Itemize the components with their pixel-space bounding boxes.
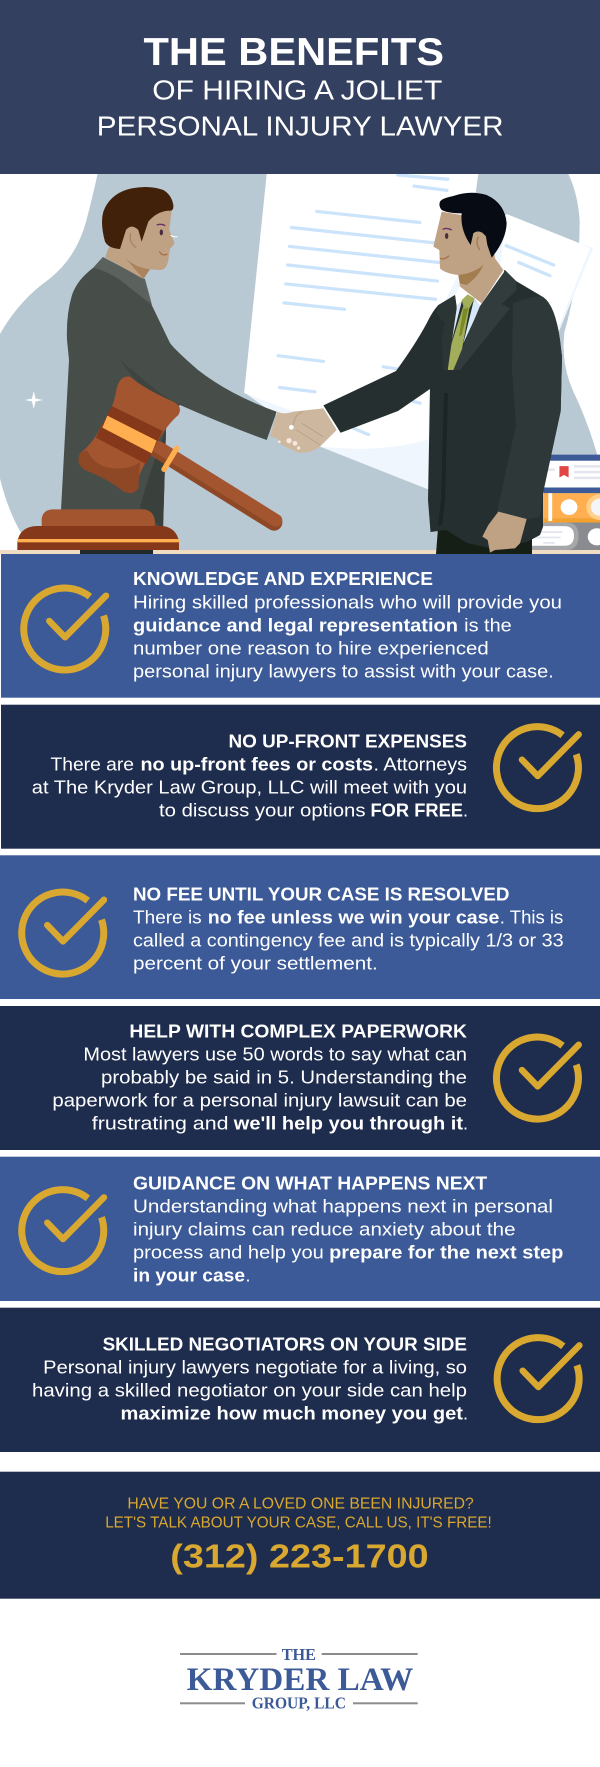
body text: number one reason to hire experienced [133, 638, 489, 658]
body text: to discuss your options [159, 800, 366, 820]
body text: no up-front fees or costs [140, 754, 373, 774]
body text: Understanding what happens next in personal [133, 1196, 553, 1216]
icon: check in circle [24, 588, 106, 670]
body text: paperwork for a personal injury lawsuit can be [52, 1090, 467, 1110]
body text: prepare for the next step [329, 1242, 563, 1262]
title: THE BENEFITS [144, 31, 444, 74]
logo: The Kryder Law Group: GROUP, LLC [252, 1694, 346, 1712]
icon: check in circle [22, 892, 104, 974]
body text: . [463, 1403, 468, 1423]
sparkle [25, 391, 43, 409]
panel: no fee until resolved [0, 855, 600, 999]
gavel head [78, 376, 180, 493]
heading: HELP WITH COMPLEX PAPERWORK [129, 1021, 467, 1041]
heading: GUIDANCE ON WHAT HAPPENS NEXT [133, 1173, 487, 1193]
icon: check in circle [497, 1338, 579, 1420]
body text: process and help you [133, 1242, 324, 1262]
backdrop: blob, documents and books [0, 174, 600, 552]
call to action text [105, 1495, 492, 1531]
body text: There is [133, 907, 202, 927]
icon: check in circle [496, 727, 579, 809]
sleeve [497, 297, 562, 519]
body text [52, 1044, 468, 1133]
jacket [61, 257, 277, 530]
body text: is the [464, 615, 512, 635]
shaking hands [270, 408, 337, 453]
body text: called a contingency fee and is typically 1/3 or 33 [133, 930, 564, 950]
legs [80, 550, 153, 554]
head [102, 187, 177, 279]
body text: at The Kryder Law Group, LLC will meet with you [32, 777, 467, 797]
icon: check in circle [22, 1190, 104, 1272]
call to action text: LET'S TALK ABOUT YOUR CASE, CALL US, IT'S FREE! [105, 1514, 492, 1531]
body text: percent of your settlement. [133, 953, 378, 973]
gavel base [42, 509, 155, 526]
icon: check in circle [496, 1037, 579, 1119]
heading: NO UP-FRONT EXPENSES [228, 731, 467, 751]
body text [32, 1357, 468, 1423]
call to action text: HAVE YOU OR A LOVED ONE BEEN INJURED? [127, 1495, 474, 1512]
floor [0, 550, 600, 554]
heading: SKILLED NEGOTIATORS ON YOUR SIDE [103, 1334, 467, 1354]
logo: The Kryder Law Group: THE [282, 1645, 316, 1664]
illustration: handshake between two lawyers [0, 174, 600, 554]
left lawyer [61, 187, 277, 554]
right lawyer [323, 193, 562, 554]
body text: frustrating and [92, 1113, 228, 1133]
body text: maximize how much money you get [120, 1403, 463, 1423]
body text: injury claims can reduce anxiety about the [133, 1219, 516, 1239]
body text: FOR FREE [370, 800, 463, 820]
body text: . This is [500, 907, 563, 927]
body text: Hiring skilled professionals who will provide you [133, 592, 562, 612]
jacket [323, 270, 562, 548]
panel: skilled negotiators [0, 1308, 600, 1452]
handle [157, 449, 274, 522]
body text: guidance and legal representation [133, 615, 458, 635]
body text: . [463, 800, 468, 820]
title [97, 31, 504, 142]
body text: we'll help you through it [233, 1113, 463, 1133]
title: OF HIRING A JOLIET [152, 74, 442, 105]
head and collar [433, 193, 517, 370]
body text [32, 754, 468, 820]
body text: no fee unless we win your case [208, 907, 499, 927]
body text: in your case [133, 1265, 245, 1285]
lapel [93, 257, 152, 305]
gavel [17, 376, 276, 550]
body text: . [246, 1265, 251, 1285]
body text [133, 592, 562, 681]
title: PERSONAL INJURY LAWYER [97, 111, 504, 142]
body text: . [463, 1113, 468, 1133]
body text: personal injury lawyers to assist with your case. [133, 661, 554, 681]
body text: There are [50, 754, 134, 774]
call to action panel [0, 1472, 600, 1599]
body text [133, 907, 564, 973]
header banner [0, 0, 600, 174]
logo: The Kryder Law Group: KRYDER LAW [187, 1662, 413, 1698]
body text: . Attorneys [374, 754, 467, 774]
panel: knowledge and experience [1, 554, 600, 698]
panel: what happens next [0, 1157, 600, 1301]
panel: no up-front expenses [1, 705, 600, 849]
trousers [436, 530, 532, 554]
body text: Most lawyers use 50 words to say what can [83, 1044, 467, 1064]
body text [133, 1196, 563, 1285]
body text: having a skilled negotiator on your side can help [32, 1380, 467, 1400]
phone number: (312) 223-1700 [170, 1537, 429, 1574]
logo: The Kryder Law Group [180, 1645, 418, 1712]
body text: Personal injury lawyers negotiate for a living, so [43, 1357, 467, 1377]
hand [482, 512, 527, 553]
heading: NO FEE UNTIL YOUR CASE IS RESOLVED [133, 884, 509, 904]
panel: complex paperwork [0, 1006, 600, 1150]
heading: KNOWLEDGE AND EXPERIENCE [133, 569, 433, 589]
body text: probably be said in 5. Understanding the [101, 1067, 467, 1087]
